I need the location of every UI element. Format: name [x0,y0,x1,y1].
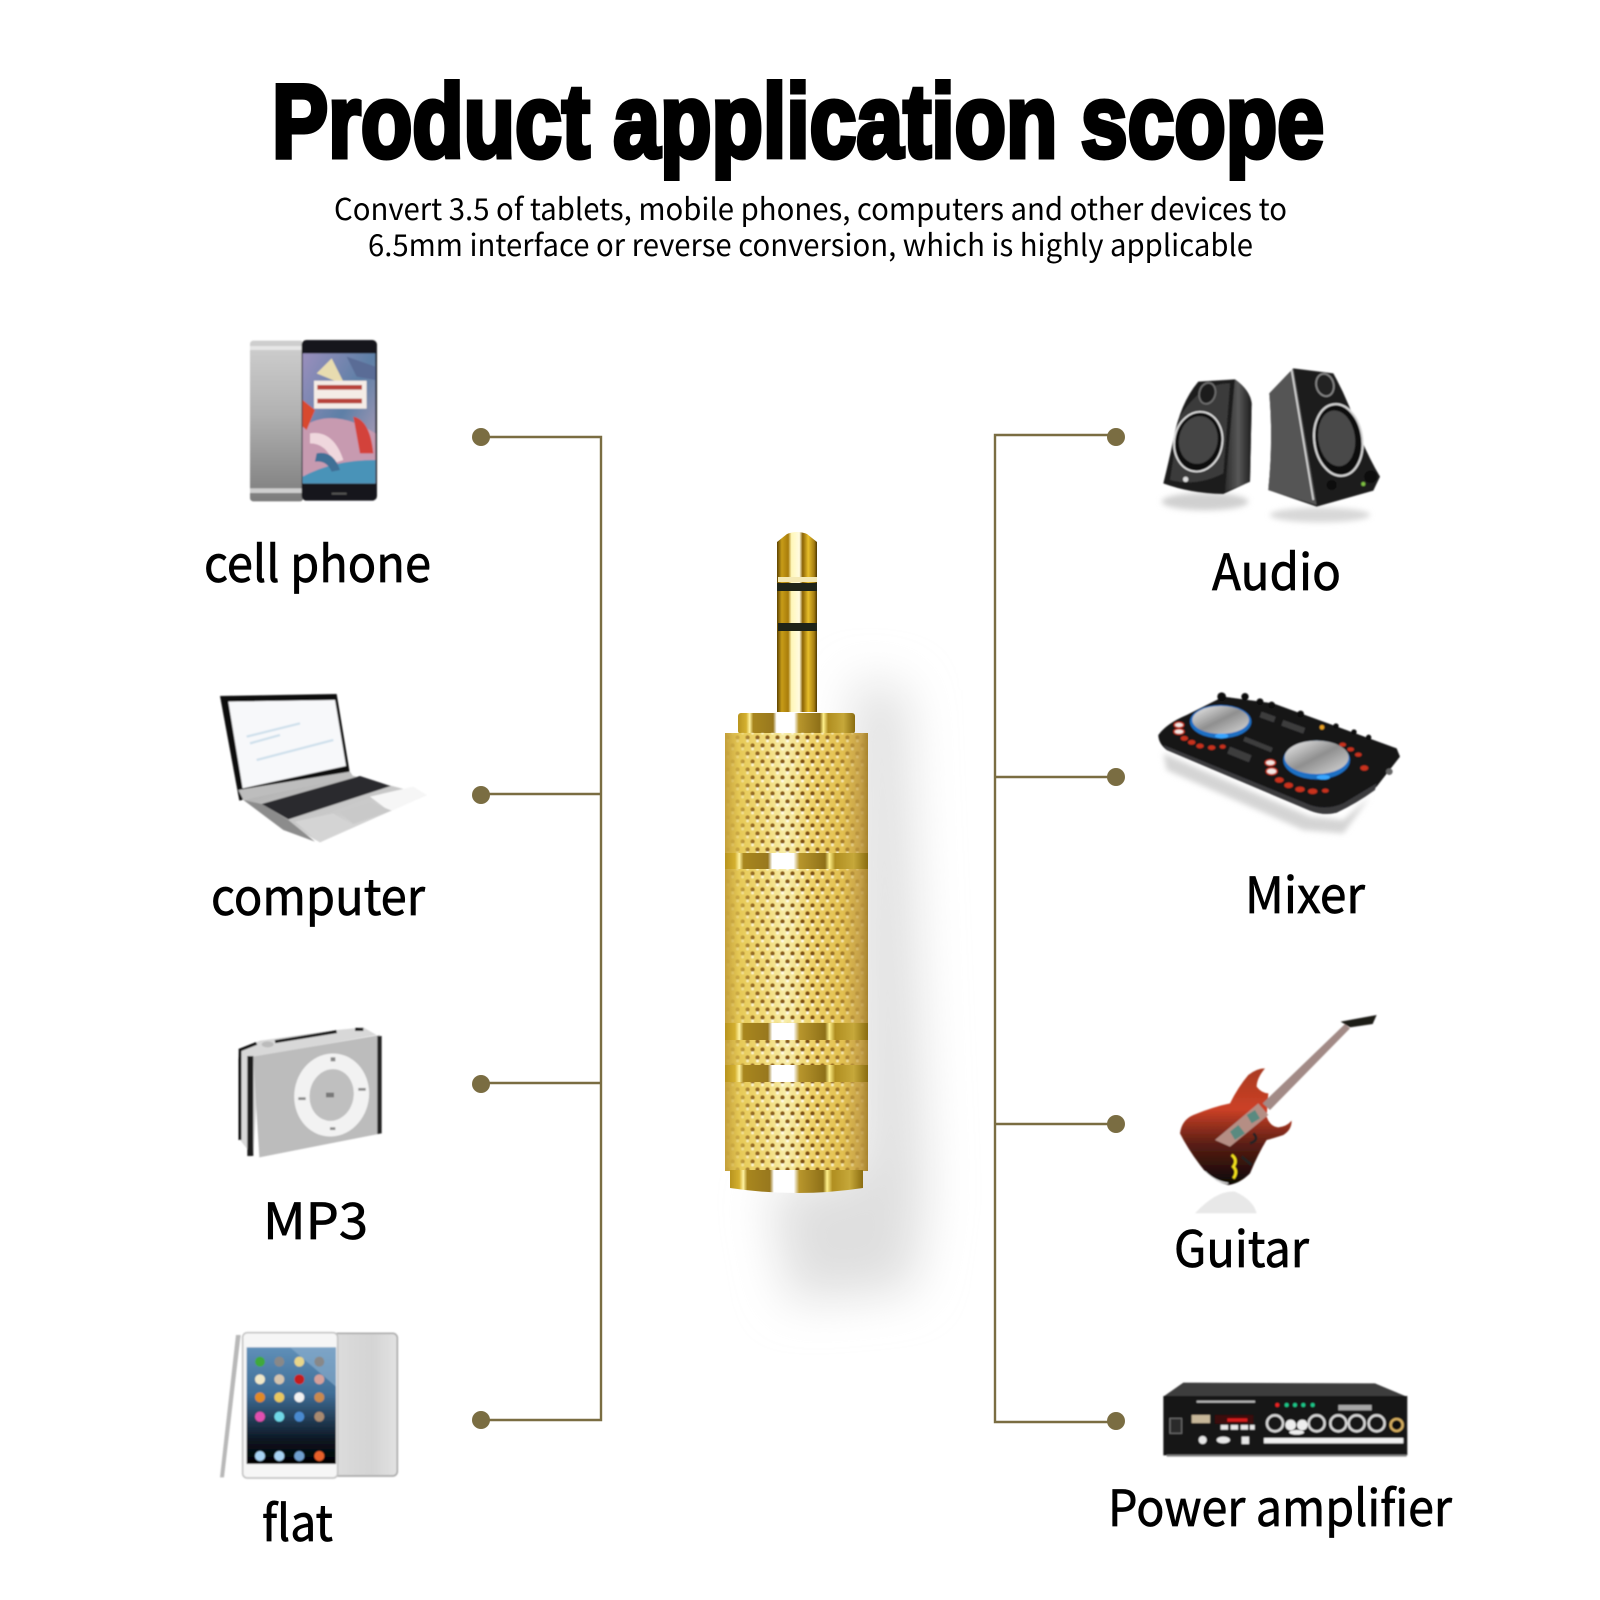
icon: laptop [220,694,427,842]
bottom collar [730,1170,863,1193]
icon: electric guitar [1180,1015,1377,1213]
label: Power amplifier [1108,1469,1453,1541]
item: Guitar [1174,1015,1377,1282]
plug pin [777,532,817,712]
item: MP3 [238,1027,382,1254]
knurled body [725,733,868,1171]
label: MP3 [263,1182,368,1254]
subtitle: Convert 3.5 of tablets, mobile phones, computers and other devices to [334,185,1287,229]
label: computer [211,858,426,930]
label: Audio [1212,533,1341,605]
left connector tree [472,428,601,1429]
icon: DJ mixer [1158,692,1400,833]
label: cell phone [204,525,431,597]
item: Power amplifier [1108,1383,1453,1541]
label: flat [262,1484,333,1556]
item: computer [211,694,427,930]
item: flat [220,1333,397,1556]
top collar [738,713,855,734]
product: gold 3.5mm to 6.5mm adapter [725,532,868,1193]
subtitle: 6.5mm interface or reverse conversion, which is highly applicable [368,221,1253,265]
icon: speakers [1162,368,1380,522]
band rings [725,853,868,1082]
right connector tree [995,428,1125,1430]
icon: phone [250,340,377,501]
label: Mixer [1245,856,1366,928]
title: Product application scope [272,64,1324,180]
icon: mp3 player [238,1027,382,1157]
icon: amplifier [1163,1383,1407,1457]
item: Mixer [1158,692,1400,928]
icon: tablet [220,1333,397,1478]
product shadow [770,680,925,1300]
item: Audio [1162,368,1380,605]
item: cell phone [204,340,431,597]
subtitle [334,185,1287,265]
label: Guitar [1174,1210,1310,1282]
